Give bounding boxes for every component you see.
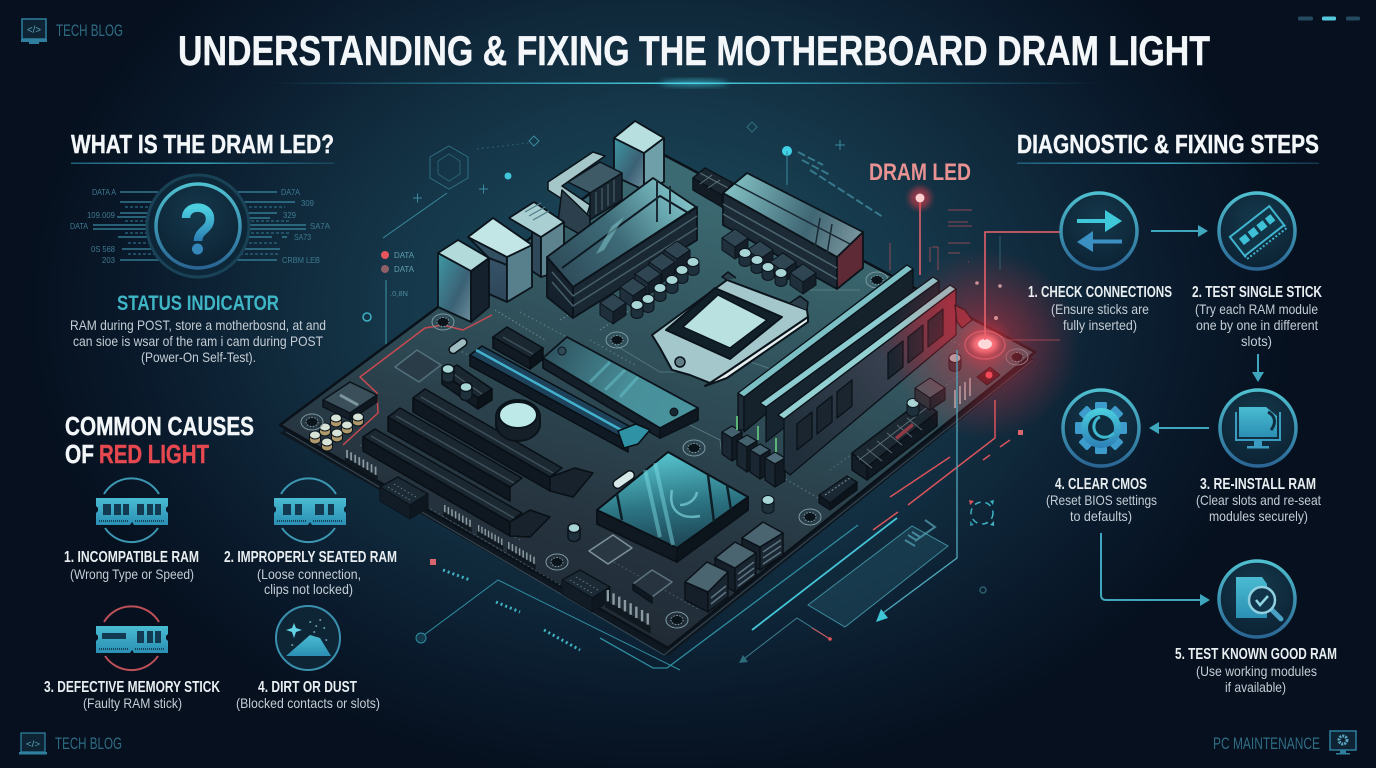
step 2: one by one in different — [1196, 317, 1318, 333]
data lines diagram: SA73 — [294, 232, 311, 242]
24-pin ATX connector — [852, 400, 937, 480]
cause 1 — [64, 478, 199, 582]
data lines diagram: DATA — [70, 221, 88, 231]
heading: common causes: COMMON CAUSES — [65, 413, 254, 441]
data lines diagram: 0S 568 — [91, 244, 115, 254]
IO block B — [468, 218, 532, 302]
short slot middle — [442, 365, 492, 409]
headers and connectors — [345, 450, 651, 634]
PCIe slot 3 — [363, 429, 550, 537]
description text: can sioe is wsar of the ram i cam during POST — [73, 333, 323, 349]
data lines diagram: 203 — [102, 255, 115, 265]
description text: RAM during POST, store a motherbosnd, at and — [70, 317, 326, 333]
cause 4: (Blocked contacts or slots) — [236, 695, 380, 711]
CMOS battery — [496, 400, 540, 441]
lower accent lines — [416, 350, 1010, 670]
decoration top of board — [747, 122, 883, 217]
logo: tech blog top: </> — [27, 25, 41, 36]
CPU socket — [652, 272, 808, 386]
PCIe slot 1 — [413, 389, 593, 497]
tall block — [614, 121, 664, 190]
legend: data dots: .0,8N — [390, 289, 408, 298]
heatsink 1 — [547, 178, 697, 318]
step 2: slots) — [1241, 333, 1272, 349]
8-pin connector — [693, 168, 733, 207]
IO block A — [438, 240, 489, 322]
icon: reticle — [969, 430, 1023, 593]
logo: tech blog top — [21, 19, 123, 44]
RAM slot clips — [722, 426, 785, 487]
step 2: (Try each RAM module — [1195, 301, 1318, 317]
chokes and capacitors — [600, 229, 816, 324]
step 2: 2. TEST SINGLE STICK — [1192, 284, 1322, 301]
cause 3 — [44, 606, 220, 711]
logo: tech blog top: TECH BLOG — [56, 21, 123, 40]
data lines diagram: 309 — [301, 198, 314, 208]
arrow: step 3 to 4 — [1149, 422, 1209, 434]
cause 1: (Wrong Type or Speed) — [70, 566, 194, 582]
cause 3: 3. DEFECTIVE MEMORY STICK — [44, 679, 220, 696]
step 5: (Use working modules — [1196, 663, 1317, 679]
small connector — [819, 476, 857, 510]
cause 3: (Faulty RAM stick) — [83, 695, 182, 711]
cause 2: (Loose connection, — [257, 566, 361, 582]
arrow: step 1 to 2 — [1151, 225, 1208, 237]
logo: PC maintenance: PC MAINTENANCE — [1213, 734, 1320, 753]
lower right components — [907, 354, 1000, 416]
red LED glow — [890, 249, 1080, 439]
step 2 — [1192, 193, 1322, 349]
decorative tech graphics left of board — [363, 136, 539, 353]
step 5: if available) — [1225, 679, 1286, 695]
step 1: 1. CHECK CONNECTIONS — [1028, 284, 1172, 301]
description text: (Power-On Self-Test). — [141, 349, 256, 365]
DRAM LED callout — [869, 159, 971, 275]
arrow: step 2 to 3 — [1252, 354, 1264, 382]
small chip left — [323, 382, 377, 420]
panel: what is the DRAM LED — [70, 131, 334, 365]
data lines diagram: 329 — [283, 210, 296, 220]
step 3: modules securely) — [1209, 508, 1308, 524]
data lines diagram: 109.009 — [87, 210, 115, 220]
arrow: step 4 to 5 — [1101, 533, 1210, 606]
legend: data dots: DATA — [394, 250, 414, 260]
stick 2 — [758, 277, 939, 442]
QFP chips — [395, 350, 672, 603]
data lines diagram: CRBM LEB — [282, 255, 320, 265]
short slot top — [493, 327, 543, 369]
logo: tech blog bottom: </> — [26, 739, 40, 749]
logo: tech blog bottom — [19, 733, 122, 754]
heading: common causes: OF — [65, 441, 94, 469]
PCIe slots — [363, 327, 650, 537]
board traces — [360, 290, 960, 610]
PCIe slot 2 — [388, 408, 522, 501]
stick 1 — [737, 265, 913, 432]
subheading: status indicator: STATUS INDICATOR — [117, 292, 279, 315]
chipset heatsink — [597, 452, 748, 562]
cause 2 — [224, 478, 397, 597]
cause 2: clips not locked) — [264, 581, 353, 597]
step 1: (Ensure sticks are — [1051, 301, 1149, 317]
red trace — [343, 315, 492, 445]
heatsink 2 — [723, 173, 863, 289]
panel: diagnostic steps — [1017, 131, 1337, 695]
panel: common causes — [44, 413, 397, 711]
step 3: (Clear slots and re-seat — [1196, 492, 1321, 508]
data lines diagram: SA7A — [310, 221, 330, 231]
step 5 — [1175, 561, 1337, 695]
port blocks — [685, 522, 783, 612]
logo: tech blog bottom: TECH BLOG — [55, 734, 122, 753]
step 4: to defaults) — [1070, 508, 1132, 524]
cause 2: 2. IMPROPERLY SEATED RAM — [224, 549, 397, 566]
legend: data dots: DATA — [394, 264, 414, 274]
step 1 — [1028, 193, 1172, 333]
data lines diagram: DATA A — [92, 187, 116, 197]
legend: data dots — [381, 250, 414, 298]
step 4 — [1046, 390, 1157, 524]
cause 4 — [236, 606, 380, 711]
step 3 — [1196, 390, 1321, 524]
description text — [70, 317, 326, 365]
red connector line to step 1 — [985, 232, 1060, 340]
motherboard illustration — [280, 121, 1035, 656]
data lines diagram: DA7A — [281, 187, 300, 197]
heading: common causes: RED LIGHT — [99, 441, 209, 469]
title underline — [270, 80, 1100, 86]
stick 3 — [776, 285, 956, 475]
DRAM LED callout: DRAM LED — [869, 159, 971, 186]
VGA connector — [548, 152, 622, 240]
data lines diagram — [70, 187, 330, 265]
step 1: fully inserted) — [1063, 317, 1137, 333]
blue PCIe slot — [470, 346, 650, 452]
heading: common causes — [65, 413, 254, 469]
step 3: 3. RE-INSTALL RAM — [1200, 476, 1316, 493]
crystals — [442, 337, 636, 542]
gold capacitors — [310, 413, 364, 451]
step 4: 4. CLEAR CMOS — [1055, 476, 1147, 493]
cause 1: 1. INCOMPATIBLE RAM — [64, 549, 199, 566]
icon: question mark — [147, 175, 249, 277]
pagination dashes — [1298, 16, 1360, 20]
IO block C — [509, 202, 564, 277]
board base — [280, 148, 1035, 656]
cause 4: 4. DIRT OR DUST — [258, 679, 357, 696]
heading: diagnostic and fixing steps: DIAGNOSTIC & FIXING STEPS — [1017, 131, 1319, 159]
PCH heatsink — [543, 337, 698, 438]
RAM sticks — [737, 265, 972, 475]
heading: what is the DRAM LED: WHAT IS THE DRAM LED? — [71, 131, 334, 159]
standoffs — [301, 272, 1028, 628]
red circuit decoration — [890, 210, 1060, 340]
step 4: (Reset BIOS settings — [1046, 492, 1157, 508]
